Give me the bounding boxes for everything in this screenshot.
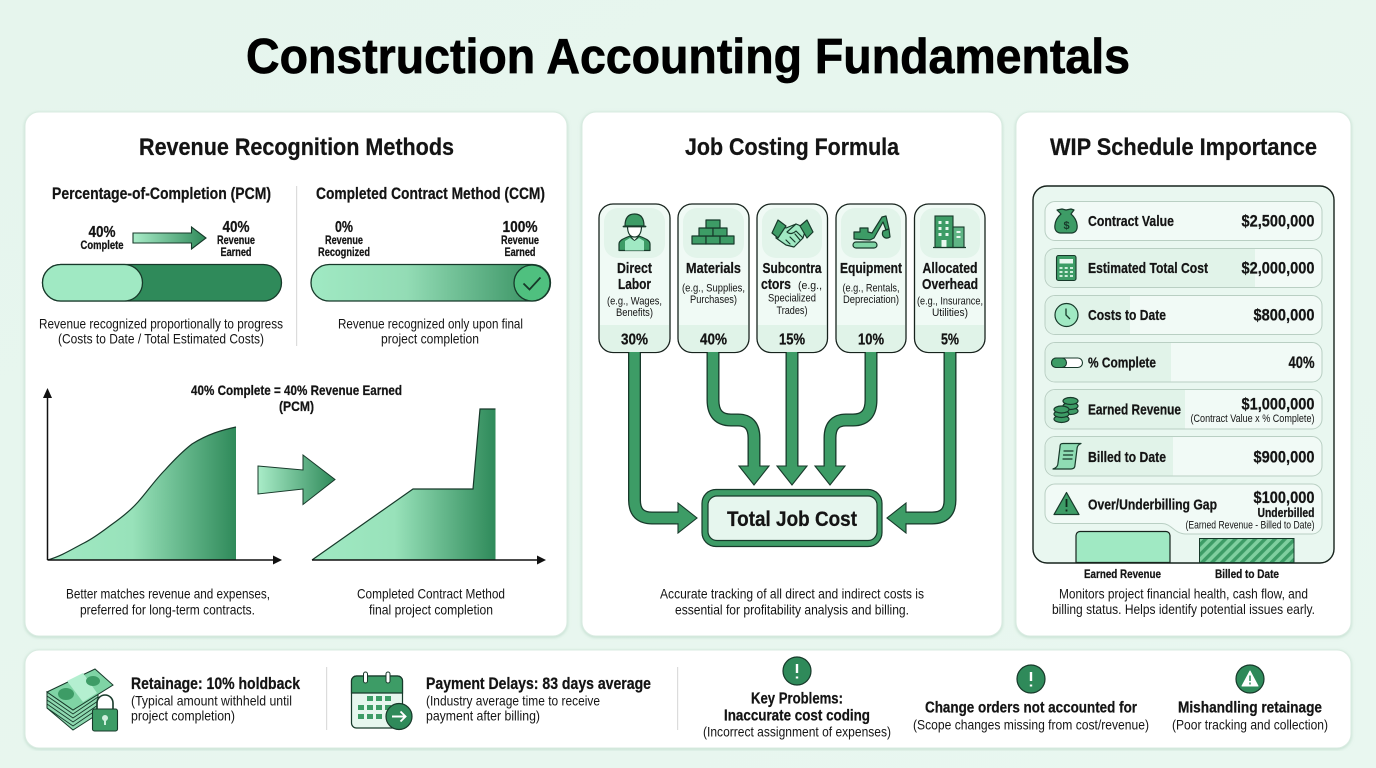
card: equipment: (e.g., Rentals, — [842, 282, 900, 294]
mishandling retainage text: Mishandling retainage — [1178, 700, 1322, 716]
card: materials: (e.g., Supplies, — [682, 282, 745, 294]
bar labels — [1084, 567, 1279, 581]
card: direct labor: Direct — [617, 260, 652, 277]
title: Construction Accounting Fundamentals — [246, 30, 1130, 84]
icon: warning circle retainage — [1236, 665, 1264, 693]
card: allocated overhead: Allocated — [922, 260, 978, 277]
arrow: materials to total — [713, 352, 769, 485]
card: materials — [678, 204, 749, 352]
panel: job costing formula — [582, 112, 1002, 636]
mishandling retainage text — [1172, 700, 1328, 732]
card: subcontractors: Subcontra — [762, 260, 822, 277]
CCM description: Revenue recognized only upon final — [338, 316, 523, 332]
subheading: PCM: Percentage-of-Completion (PCM) — [52, 184, 271, 203]
payment delays text: payment after billing) — [426, 708, 540, 724]
card: materials: Purchases) — [690, 294, 737, 306]
CCM chart note: Completed Contract Method — [357, 586, 505, 602]
arrow: equipment to total — [815, 352, 871, 485]
PCM arrow — [133, 227, 206, 249]
subheading: CCM: Completed Contract Method (CCM) — [316, 184, 545, 203]
icon: worker — [619, 214, 650, 250]
CCM revenue earned label: Revenue — [501, 235, 539, 247]
chart caption: 40% Complete = 40% Revenue Earned — [191, 382, 402, 398]
PCM progress bar — [42, 264, 282, 301]
key problems text — [703, 690, 891, 740]
row: percent complete: 40% — [1288, 353, 1314, 372]
icon: alert circle key problems — [783, 657, 811, 685]
PCM revenue earned label — [217, 219, 255, 259]
CCM revenue earned label: Earned — [504, 247, 536, 259]
CCM chart note — [357, 586, 505, 618]
card: subcontractors: ctors — [761, 276, 791, 293]
row: estimated total cost: $2,000,000 — [1242, 258, 1314, 278]
card: direct labor: Labor — [618, 276, 651, 293]
WIP note: billing status. Helps identify potential issues early. — [1052, 601, 1315, 617]
icon: warning triangle — [1054, 492, 1079, 514]
icon: bricks — [692, 220, 734, 244]
PCM revenue earned label: Earned — [220, 247, 252, 259]
job costing note: essential for profitability analysis and billing. — [675, 602, 909, 618]
panel: revenue recognition methods — [25, 112, 567, 636]
icon: money bag — [1055, 209, 1077, 233]
row: over/underbilling gap: $100,000 — [1254, 488, 1314, 507]
card: allocated overhead — [914, 204, 985, 352]
card: subcontractors: 15% — [779, 332, 805, 348]
CCM revenue recognized label: Revenue — [325, 235, 363, 247]
PCM complete label — [80, 224, 124, 252]
CCM revenue recognized label: Recognized — [318, 247, 370, 259]
arrow between charts — [258, 455, 335, 504]
key problems text: Key Problems: — [751, 690, 843, 708]
PCM chart note: preferred for long-term contracts. — [80, 602, 255, 618]
change orders text — [913, 700, 1149, 732]
CCM description — [338, 316, 523, 346]
icon: calendar with arrow — [352, 672, 412, 730]
card: subcontractors: (e.g., — [798, 280, 822, 292]
icon: money bag: $ — [1063, 220, 1070, 232]
PCM description: Revenue recognized proportionally to progress — [39, 316, 283, 332]
mishandling retainage text: (Poor tracking and collection) — [1172, 716, 1328, 732]
icon: office building — [933, 216, 966, 248]
WIP note — [1052, 586, 1315, 617]
PCM chart note: Better matches revenue and expenses, — [66, 586, 270, 602]
PCM revenue earned label: Revenue — [217, 235, 255, 247]
arrow: overhead to total — [887, 352, 950, 533]
row: percent complete — [1045, 342, 1322, 382]
row: contract value: Contract Value — [1088, 213, 1174, 230]
CCM revenue recognized label: 0% — [335, 219, 353, 236]
card: direct labor — [599, 204, 670, 352]
row: costs to date: Costs to Date — [1088, 307, 1166, 324]
row: earned revenue: $1,000,000 — [1242, 394, 1314, 414]
heading: revenue recognition: Revenue Recognition Methods — [139, 134, 454, 161]
chart: PCM revenue curve — [43, 388, 282, 564]
chart: CCM revenue step — [312, 409, 546, 564]
heading: job costing: Job Costing Formula — [685, 134, 900, 161]
icon: excavator — [853, 216, 890, 248]
icon: handshake — [772, 220, 813, 247]
panel: WIP schedule importance — [1016, 112, 1351, 636]
row: earned revenue: (Contract Value x % Complete) — [1190, 413, 1314, 425]
card: direct labor: Benefits) — [616, 307, 653, 319]
row: billed to date — [1045, 436, 1322, 476]
card: allocated overhead: (e.g., Insurance, — [917, 296, 983, 308]
row: percent complete: % Complete — [1088, 354, 1156, 372]
CCM revenue recognized label — [318, 219, 370, 259]
icon: calculator — [1056, 256, 1076, 280]
card: allocated overhead: Overhead — [922, 276, 978, 293]
CCM description: project completion — [381, 330, 479, 346]
PCM complete label: Complete — [80, 240, 124, 252]
PCM complete label: 40% — [88, 224, 116, 241]
chart caption — [191, 382, 402, 414]
job costing note: Accurate tracking of all direct and indirect costs is — [660, 586, 924, 602]
row: over/underbilling gap: Over/Underbilling Gap — [1088, 496, 1217, 514]
total job cost box — [702, 490, 882, 546]
PCM chart note — [66, 586, 270, 618]
card: subcontractors: Specialized — [768, 292, 816, 304]
row: costs to date: $800,000 — [1254, 306, 1314, 324]
icon: invoice scroll — [1053, 444, 1081, 469]
retainage text: project completion) — [131, 708, 235, 724]
card: direct labor: 30% — [621, 332, 648, 348]
icon: progress toggle — [1052, 358, 1082, 368]
row: billed to date: $900,000 — [1254, 448, 1314, 466]
card: equipment: 10% — [858, 332, 884, 348]
card: materials: Materials — [686, 260, 741, 277]
arrow: subcontractors to total — [777, 352, 807, 485]
heading: WIP: WIP Schedule Importance — [1050, 134, 1317, 161]
card: equipment: Equipment — [840, 260, 902, 277]
bar labels: Billed to Date — [1215, 567, 1279, 581]
WIP schedule container — [1033, 186, 1334, 563]
panel: bottom strip — [25, 650, 1351, 748]
icon: money stack with lock — [47, 669, 118, 731]
PCM description: (Costs to Date / Total Estimated Costs) — [58, 330, 264, 346]
row: estimated total cost: Estimated Total Cost — [1088, 260, 1208, 277]
job costing note — [660, 586, 924, 618]
retainage text: (Typical amount withheld until — [131, 692, 292, 708]
row: estimated total cost — [1045, 248, 1322, 288]
icon: alert circle change orders — [1017, 665, 1045, 693]
card: direct labor: (e.g., Wages, — [607, 296, 662, 308]
CCM chart note: final project completion — [369, 602, 493, 618]
change orders text: Change orders not accounted for — [925, 700, 1137, 716]
row: over/underbilling gap: Underbilled — [1258, 506, 1314, 520]
payment delays text: Payment Delays: 83 days average — [426, 674, 651, 693]
card: allocated overhead: Utilities) — [932, 307, 968, 319]
row: over/underbilling gap — [1045, 484, 1322, 534]
row: contract value: $2,500,000 — [1242, 212, 1314, 230]
card: equipment: Depreciation) — [843, 294, 899, 306]
retainage text — [131, 674, 300, 724]
row: earned revenue — [1045, 390, 1322, 429]
icon: coin stacks — [1054, 398, 1078, 422]
icon: clock — [1055, 304, 1078, 326]
key problems text: Inaccurate cost coding — [724, 708, 870, 724]
card: subcontractors — [757, 204, 828, 352]
card: equipment — [836, 204, 906, 352]
bar labels: Earned Revenue — [1084, 567, 1161, 581]
PCM revenue earned label: 40% — [222, 219, 250, 236]
total job cost box: Total Job Cost — [727, 508, 857, 531]
row: costs to date — [1045, 296, 1322, 334]
chart caption: (PCM) — [279, 398, 314, 414]
retainage text: Retainage: 10% holdback — [131, 674, 300, 693]
bar: billed to date — [1200, 538, 1294, 562]
row: billed to date: Billed to Date — [1088, 449, 1166, 466]
card: subcontractors: Trades) — [776, 305, 808, 317]
row: contract value — [1045, 202, 1322, 240]
arrow: direct labor to total — [634, 352, 697, 533]
CCM progress bar with check — [311, 264, 550, 301]
CCM revenue earned label — [501, 219, 539, 259]
bar: earned revenue — [1076, 532, 1170, 562]
card: materials: 40% — [700, 332, 727, 348]
change orders text: (Scope changes missing from cost/revenue) — [913, 716, 1149, 732]
row: over/underbilling gap: (Earned Revenue - Billed to Date) — [1186, 520, 1314, 532]
card: allocated overhead: 5% — [941, 332, 959, 348]
WIP note: Monitors project financial health, cash flow, and — [1059, 586, 1308, 602]
PCM description — [39, 316, 283, 346]
key problems text: (Incorrect assignment of expenses) — [703, 724, 891, 740]
payment delays text — [426, 674, 651, 724]
payment delays text: (Industry average time to receive — [426, 692, 600, 708]
row: earned revenue: Earned Revenue — [1088, 402, 1181, 418]
CCM revenue earned label: 100% — [502, 219, 538, 236]
